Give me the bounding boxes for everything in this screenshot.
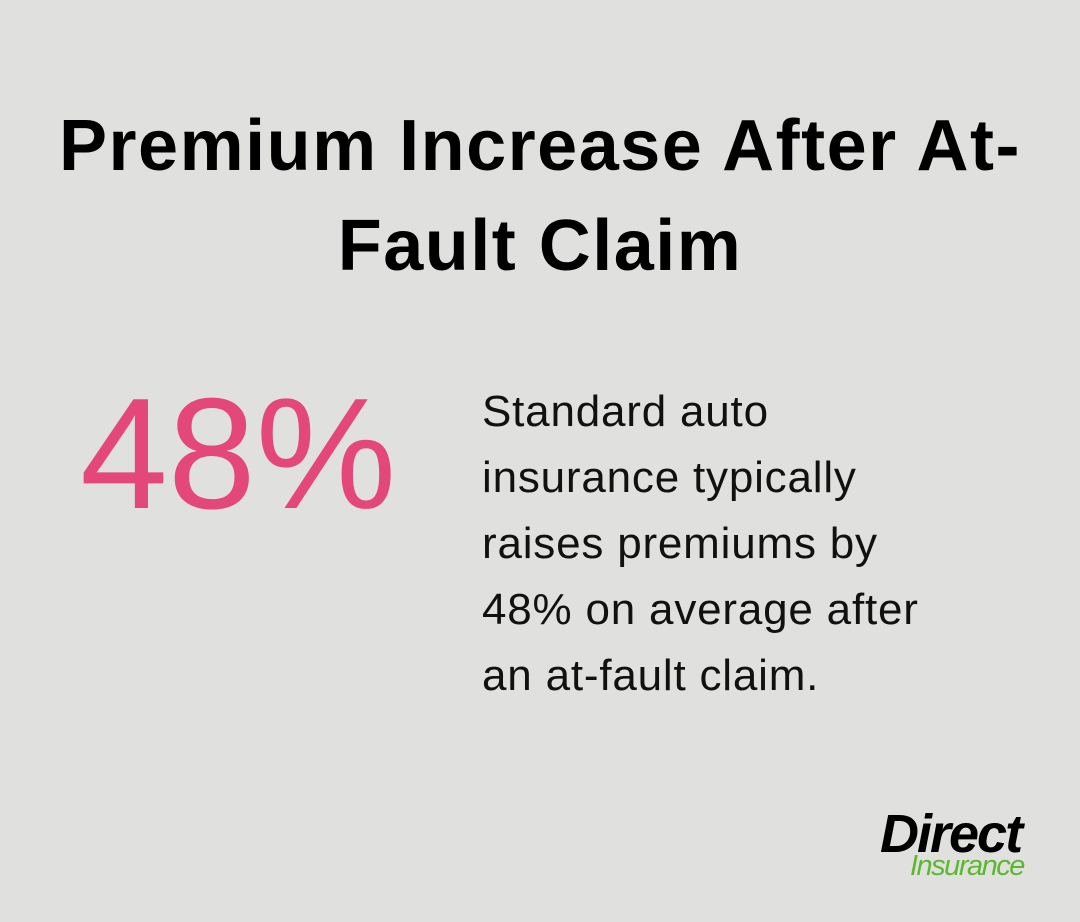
big statistic: 48% <box>80 366 396 542</box>
description text: 48% on average after <box>482 585 919 634</box>
title: Premium Increase After At- <box>59 106 1021 186</box>
title <box>59 106 1021 286</box>
description text: raises premiums by <box>482 519 878 568</box>
description text: Standard auto <box>482 387 769 436</box>
description text <box>482 387 919 700</box>
title: Fault Claim <box>338 206 742 286</box>
description text: an at-fault claim. <box>482 651 819 700</box>
logo: Direct Insurance: Insurance <box>910 850 1024 882</box>
logo: Direct Insurance: Direct <box>880 804 1021 864</box>
description text: insurance typically <box>482 453 857 502</box>
